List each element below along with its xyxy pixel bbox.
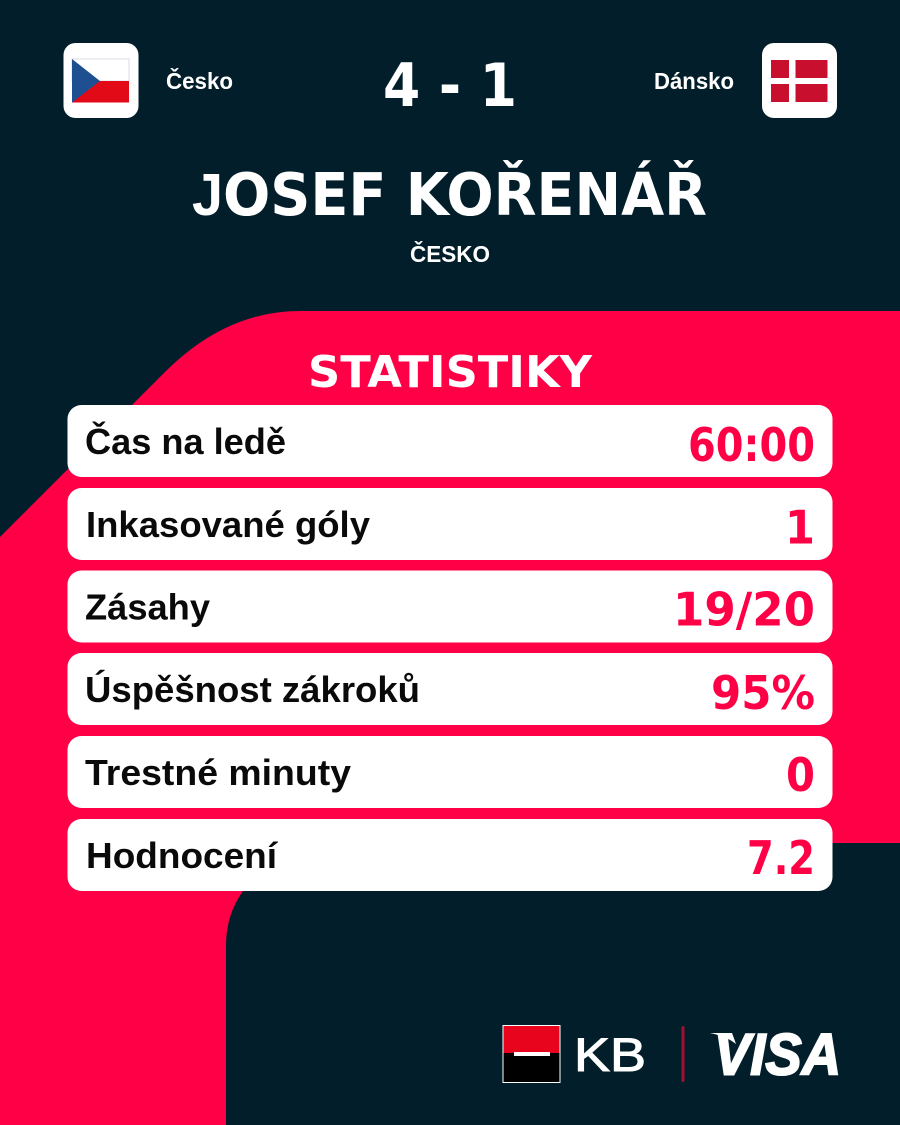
row: time on ice	[68, 405, 832, 477]
stats table	[68, 405, 832, 891]
red background shape	[0, 311, 900, 1125]
player name: JOSEF KOŘENÁŘ	[192, 160, 707, 229]
row: saves	[68, 570, 832, 642]
sponsor logo: KB: KB	[574, 1028, 646, 1081]
row: rating	[68, 819, 832, 891]
row: rating: Hodnocení	[86, 835, 278, 876]
row: save percentage: 95%	[711, 666, 815, 720]
row: penalty minutes: 0	[786, 748, 815, 802]
row: save percentage: Úspěšnost zákroků	[85, 668, 420, 710]
row: goals against	[68, 488, 832, 560]
sponsor logo: KB	[503, 1026, 646, 1082]
player country: ČESKO	[410, 240, 490, 267]
row: time on ice: 60:00	[688, 418, 815, 472]
row: penalty minutes: Trestné minuty	[85, 752, 351, 793]
row: saves: Zásahy	[85, 586, 210, 628]
row: time on ice: Čas na ledě	[85, 420, 286, 462]
row: goals against: Inkasované góly	[86, 504, 370, 545]
team: Czechia flag	[64, 43, 138, 118]
team name: Dánsko: Dánsko	[654, 68, 734, 94]
score: 4 - 1	[383, 51, 517, 121]
row: goals against: 1	[785, 500, 815, 554]
sponsor logo: Visa: VISA	[714, 1022, 841, 1088]
row: penalty minutes	[68, 736, 832, 808]
heading: statistiky: STATISTIKY	[308, 347, 593, 398]
team name: Česko: Česko	[166, 67, 233, 94]
row: rating: 7.2	[747, 831, 815, 885]
row: save percentage	[68, 653, 832, 725]
row: saves: 19/20	[673, 582, 815, 636]
sponsor divider	[682, 1026, 684, 1082]
team: Denmark flag	[762, 43, 837, 118]
